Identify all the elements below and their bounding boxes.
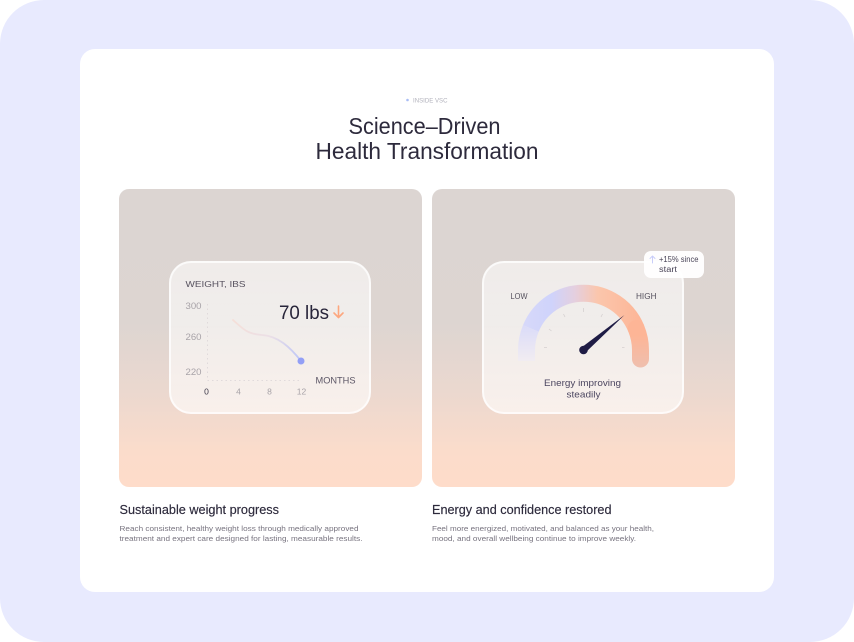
caption: weight progress: Sustainable weight progress: [120, 503, 279, 517]
gauge caption: [544, 378, 621, 400]
badge text: [659, 255, 699, 274]
weight trend line: [233, 320, 304, 364]
caption: energy restored: Feel more energized, motivated, and balanced as your health,: [432, 524, 654, 533]
gauge needle: [579, 315, 624, 354]
gauge labels: [510, 292, 657, 301]
captions: [120, 503, 654, 543]
title: Health Transformation: [316, 138, 538, 164]
y axis labels: 220: [186, 367, 202, 377]
gauge labels: LOW: [510, 292, 528, 301]
caption: weight progress: Reach consistent, healthy weight loss through medically approved: [120, 524, 358, 533]
caption: energy restored: [432, 503, 654, 543]
badge: +15% since start: [644, 251, 704, 278]
gauge arc: [526, 293, 640, 361]
x axis labels: 12: [297, 386, 306, 396]
gauge caption: steadily: [566, 390, 601, 400]
x axis labels: 0: [204, 386, 209, 396]
icon: up arrow: [650, 256, 655, 263]
gauge card: [482, 261, 684, 414]
y axis labels: [186, 301, 202, 377]
caption: energy restored: Energy and confidence restored: [432, 503, 612, 517]
weight change callout: 70 lbs: [279, 302, 329, 324]
gauge caption: Energy improving: [544, 378, 621, 389]
panel: energy gauge: [432, 189, 735, 487]
y axis labels: 300: [186, 301, 202, 311]
weight chart card: [169, 261, 371, 414]
y axis labels: 260: [186, 332, 202, 342]
title: Science–Driven: [348, 113, 500, 139]
eyebrow label: INSIDE VSC: [413, 98, 448, 104]
chart axes: [208, 304, 302, 380]
gauge labels: HIGH: [636, 292, 657, 301]
badge text: +15% since: [659, 255, 699, 264]
badge text: start: [659, 265, 678, 274]
x axis labels: 4: [236, 386, 241, 396]
caption: energy restored: mood, and overall wellbeing continue to improve weekly.: [432, 534, 636, 543]
gauge ticks: [544, 308, 624, 348]
panel: weight progress: [119, 189, 422, 487]
x axis labels: [204, 386, 306, 396]
chart heading: WEIGHT, IBS: [186, 279, 246, 289]
white content card: [80, 49, 774, 592]
x axis labels: 8: [267, 386, 272, 396]
x axis title: MONTHS: [316, 376, 356, 386]
title: [316, 113, 538, 164]
section header: [316, 98, 538, 164]
caption: weight progress: [120, 503, 362, 543]
caption: weight progress: treatment and expert care designed for lasting, measurable results.: [120, 534, 362, 543]
